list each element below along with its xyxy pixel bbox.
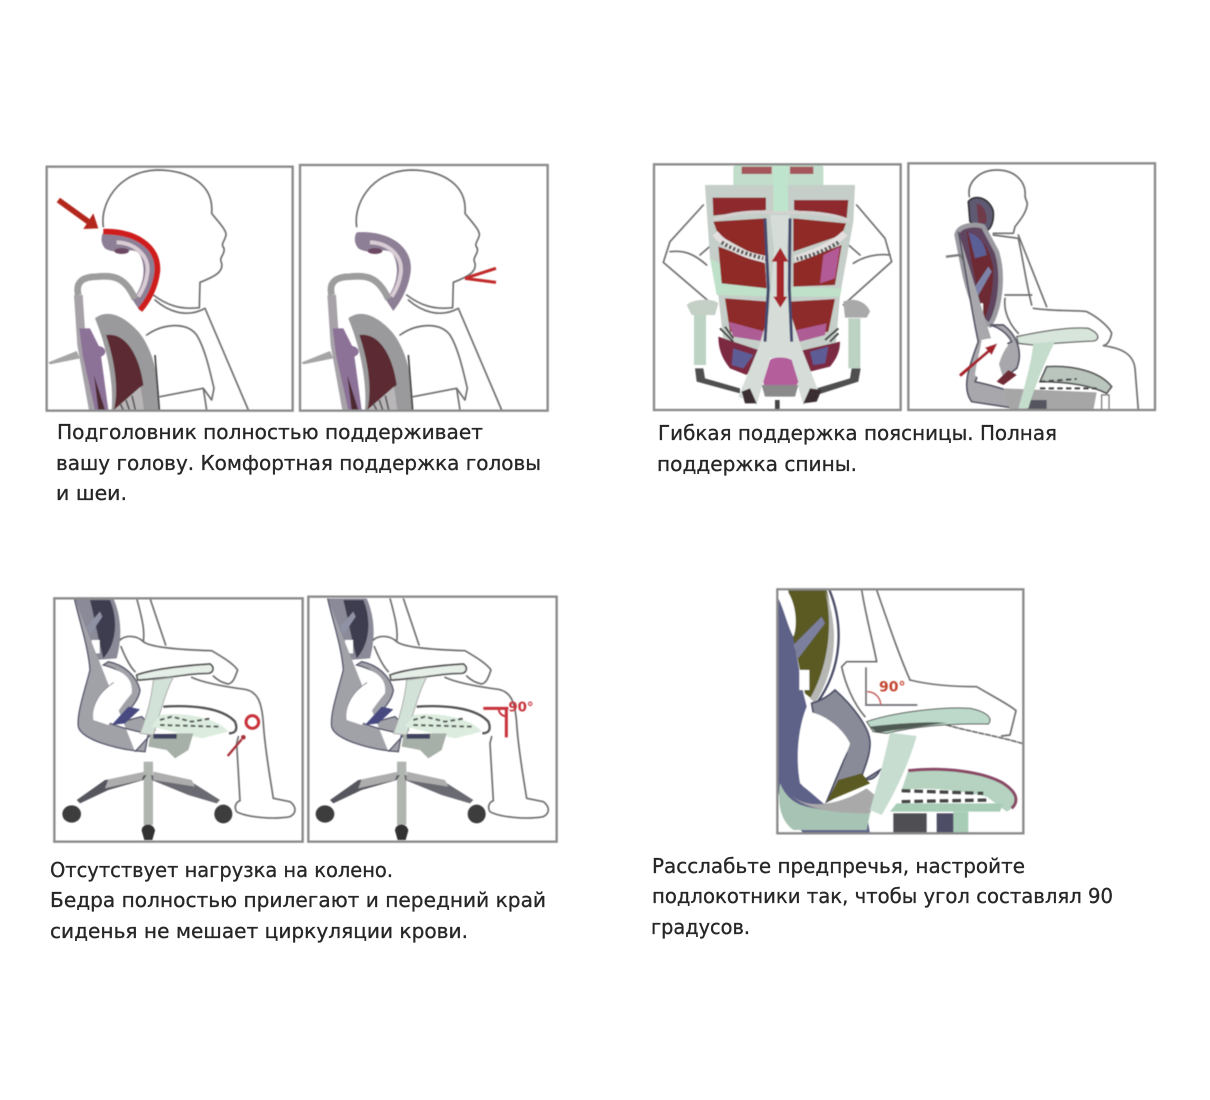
caption: armrest: подлокотники так, чтобы угол составлял 90 bbox=[652, 884, 1113, 908]
highlight: red headrest edge bbox=[103, 232, 157, 310]
panel: chair back view with lumbar support bbox=[654, 164, 901, 410]
frame: right headrest panel bbox=[300, 165, 548, 411]
caption: armrest: градусов. bbox=[651, 915, 750, 939]
frame: armrest panel bbox=[777, 589, 1023, 833]
icon: red 90 degree knee angle bbox=[483, 700, 534, 737]
caption: headrest: и шеи. bbox=[56, 481, 127, 505]
arrow: lumbar push bbox=[960, 343, 997, 376]
caption: knee and thigh bbox=[50, 858, 546, 943]
frame: thigh panel bbox=[308, 597, 557, 842]
icon: red circle at knee bbox=[246, 716, 259, 728]
caption: lumbar support: Гибкая поддержка поясницы. Полная bbox=[658, 421, 1057, 445]
arrow: lumbar adjustment up and down bbox=[772, 248, 788, 308]
icon: red 90 degree armrest angle bbox=[866, 667, 917, 705]
icon: red 90 degree knee angle: 90° bbox=[508, 700, 534, 715]
panel: seated side view with lumbar arrow bbox=[908, 163, 1155, 410]
arrow: red pointer to knee bbox=[228, 735, 246, 756]
frame: back view panel bbox=[654, 164, 901, 410]
panel: neck support bbox=[300, 165, 548, 411]
caption: headrest: вашу голову. Комфортная поддержка головы bbox=[56, 451, 541, 475]
caption: knee and thigh: Бедра полностью прилегают и передний край bbox=[50, 888, 546, 912]
panel: armrest 90 degrees bbox=[777, 589, 1023, 833]
caption: knee and thigh: Отсутствует нагрузка на колено. bbox=[50, 858, 393, 882]
arrow: red pointer to headrest bbox=[58, 200, 98, 229]
icon: red 90 degree armrest angle: 90° bbox=[879, 680, 905, 696]
icon: red angle mark at chin bbox=[465, 268, 496, 282]
frame: side view panel bbox=[908, 163, 1155, 410]
caption: lumbar support: поддержка спины. bbox=[657, 452, 857, 476]
caption: headrest bbox=[56, 420, 541, 505]
caption: armrest: Расслабьте предпречья, настройте bbox=[652, 854, 1025, 878]
frame: left headrest panel bbox=[47, 167, 293, 411]
caption: lumbar support bbox=[657, 421, 1057, 476]
caption: armrest bbox=[651, 854, 1113, 939]
panel: headrest full support bbox=[47, 167, 293, 411]
caption: knee and thigh: сиденья не мешает циркуляции крови. bbox=[50, 919, 468, 943]
panel: thigh 90 degree support bbox=[308, 597, 557, 842]
caption: headrest: Подголовник полностью поддерживает bbox=[57, 420, 483, 444]
frame: knee panel bbox=[54, 598, 303, 842]
panel: no knee pressure bbox=[54, 598, 303, 842]
